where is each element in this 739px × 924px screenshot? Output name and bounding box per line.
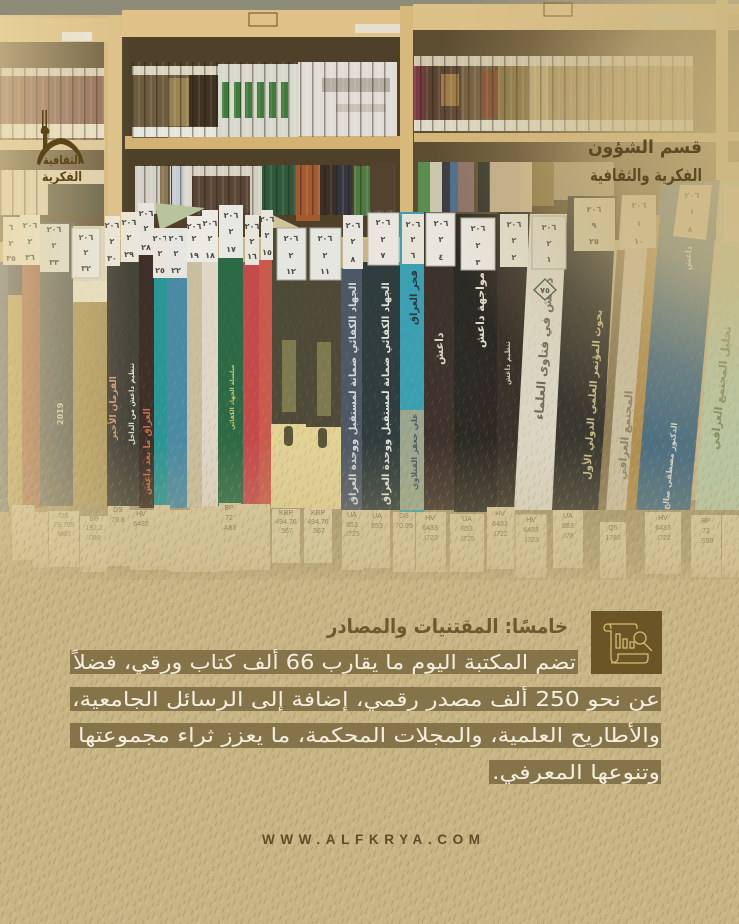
body text with highlighted lines: والأطاريح العلمية، والمجلات المحكمة، ما يعزز ثراء مجموعتها bbox=[78, 723, 660, 747]
spine number labels: ٢٠٦ bbox=[47, 225, 61, 234]
spine number labels: ٣٣ bbox=[49, 258, 59, 267]
call number stickers: KBP bbox=[311, 510, 325, 517]
spine number labels: ٢ bbox=[381, 235, 386, 244]
spine number labels: ٤ bbox=[439, 253, 444, 262]
call number stickers: 6433 bbox=[422, 525, 438, 532]
body text with highlighted lines: عن نحو 250 ألف مصدر رقمي، إضافة إلى الرسائل الجامعية، bbox=[72, 686, 660, 712]
book spine titles: المجتمع العراقي bbox=[615, 390, 636, 480]
call number stickers: M83 bbox=[57, 531, 71, 538]
books: lower shelf, right cell bbox=[370, 162, 739, 212]
spine number labels: ٢ bbox=[144, 224, 149, 233]
spine number labels: ١١ bbox=[320, 267, 330, 276]
spine number labels: ٢٥ bbox=[155, 266, 165, 275]
spine number labels: ١٢ bbox=[286, 267, 296, 276]
department heading bbox=[588, 137, 702, 186]
call number stickers: .S58 bbox=[699, 538, 713, 545]
spine number labels: ٢ bbox=[174, 249, 179, 258]
bookshelf unit bbox=[0, 0, 739, 242]
shadow gap beneath the books bbox=[0, 500, 739, 580]
book spine titles: تنظيم داعش bbox=[504, 341, 512, 385]
spine number labels: ٢٠٦ bbox=[587, 205, 601, 214]
spine number labels: ٢٠٦ bbox=[224, 211, 238, 220]
spine number labels: ٢ bbox=[351, 237, 356, 246]
call number stickers: 6433 bbox=[655, 525, 671, 532]
call number stickers: 494.76 bbox=[307, 519, 329, 526]
call number stickers: .I722 bbox=[422, 535, 438, 542]
book spine titles: سلسلة الجهاد الكفائي bbox=[229, 365, 236, 430]
call number stickers: UA bbox=[347, 512, 357, 519]
call number stickers: .I723 bbox=[523, 537, 539, 544]
call number stickers: HV bbox=[495, 511, 505, 518]
spine number labels: ٣٦ bbox=[25, 253, 35, 262]
spine number labels: ٢٩ bbox=[124, 250, 134, 259]
call number stickers: BP bbox=[89, 516, 99, 523]
badge on book spine bbox=[534, 279, 556, 300]
book spine titles: فخر العراق bbox=[409, 270, 420, 325]
spine number labels: ٢٠٦ bbox=[105, 221, 119, 230]
call number stickers: 853 bbox=[461, 526, 473, 533]
paper texture bbox=[0, 280, 739, 924]
call number stickers: 6433 bbox=[492, 521, 508, 528]
spine number labels: ٦ bbox=[9, 223, 14, 232]
call number stickers: 192.2 bbox=[85, 525, 103, 532]
book spine titles: تنظيم داعش من الداخل bbox=[128, 363, 136, 445]
book spine titles: الدكتور مصطفى صالح bbox=[661, 422, 679, 510]
logo bbox=[37, 110, 84, 185]
spine number labels: ٢٠٦ bbox=[139, 209, 153, 218]
department heading: قسم الشؤون bbox=[588, 137, 702, 158]
spine number labels: ١٧ bbox=[226, 245, 236, 254]
call number stickers: HV bbox=[658, 515, 668, 522]
spine number labels: ٢٠٦ bbox=[542, 223, 556, 232]
spine number labels: ٢ bbox=[192, 234, 197, 243]
department heading: الفكرية والثقافية bbox=[590, 166, 702, 186]
spine number labels: ١ bbox=[547, 255, 551, 264]
spine number labels: ٢٠٦ bbox=[79, 233, 93, 242]
call number stickers: .I725 bbox=[459, 536, 475, 543]
spine number labels: ١٦ bbox=[247, 252, 257, 261]
spine number labels: ٢ bbox=[250, 237, 255, 246]
book spine titles: بحوث المؤتمر العلمي الدولي الأول bbox=[580, 309, 605, 480]
spine number labels: ٣٢ bbox=[81, 264, 91, 273]
spine number labels: ٢ bbox=[323, 251, 328, 260]
spine number labels: ٦ bbox=[411, 251, 416, 260]
spine number labels: ٢٥ bbox=[589, 237, 599, 246]
spine number labels: ٢٠٦ bbox=[434, 219, 448, 228]
book spine titles: داعش في فتاوى العلماء bbox=[532, 277, 557, 420]
spine number labels bbox=[3, 185, 739, 280]
book spine titles: علي جعفر الفتلاوي bbox=[410, 413, 419, 490]
spine number labels: ١٥ bbox=[262, 248, 272, 257]
call number stickers: 79.789 bbox=[53, 522, 75, 529]
call number stickers: 853 bbox=[346, 522, 358, 529]
logo: الثقافية bbox=[43, 153, 81, 167]
call number stickers: 79.8 bbox=[111, 517, 125, 524]
call number stickers: DS bbox=[59, 513, 69, 520]
spine number labels: ٧ bbox=[381, 251, 386, 260]
spine number labels: ٢ bbox=[512, 236, 517, 245]
call number stickers: HV bbox=[136, 511, 146, 518]
spine number labels: ٣٠ bbox=[107, 254, 117, 263]
spine number labels: ٢٠٦ bbox=[23, 221, 37, 230]
books: upper shelf, middle cell bbox=[132, 62, 397, 138]
call number stickers: BP bbox=[224, 505, 234, 512]
spine number labels: ٢ bbox=[208, 234, 213, 243]
book spine titles: الفرمان الأخير bbox=[107, 376, 119, 441]
spine number labels: ٢ bbox=[265, 231, 270, 240]
call number stickers: 6433 bbox=[133, 521, 149, 528]
spine number labels: ٢٠٦ bbox=[471, 224, 485, 233]
call number stickers: 853 bbox=[371, 523, 383, 530]
call number stickers: 6433 bbox=[523, 527, 539, 534]
call number stickers: UA bbox=[563, 513, 573, 520]
spine number labels: ٢ bbox=[127, 233, 132, 242]
spine number labels: ٢٠٦ bbox=[203, 219, 217, 228]
section title: خامسًا: المقتنيات والمصادر bbox=[326, 614, 568, 638]
spine number labels: ٨ bbox=[351, 255, 356, 264]
spine number labels: ٢٠٦ bbox=[153, 234, 167, 243]
spine number labels: ٣٥ bbox=[6, 254, 16, 263]
book spine titles: الجهاد الكفائي ضمانة لمستقبل ووحدة العراق bbox=[348, 282, 359, 505]
book spine titles: العراق ما بعد داعش bbox=[143, 408, 153, 495]
badge on book spine: ٧٥ bbox=[540, 286, 550, 295]
logo: الفكرية bbox=[42, 170, 82, 185]
call number stickers: HV bbox=[425, 515, 435, 522]
spine number labels: ٢٠٦ bbox=[685, 191, 699, 200]
call number stickers: Q5 bbox=[608, 525, 618, 532]
call number stickers: .A83 bbox=[222, 525, 236, 532]
call number stickers: .567 bbox=[311, 528, 325, 535]
spine number labels: ٢ bbox=[84, 248, 89, 257]
spine number labels: ١٩ bbox=[189, 251, 199, 260]
body text with highlighted lines bbox=[70, 649, 661, 785]
call number stickers: HV bbox=[526, 517, 536, 524]
spine number labels: ١ bbox=[637, 219, 641, 228]
spine number labels: ٢ bbox=[52, 241, 57, 250]
call number stickers: .567 bbox=[279, 528, 293, 535]
spine number labels: ٢٠٦ bbox=[318, 234, 332, 243]
spine number labels: ٢ bbox=[411, 235, 416, 244]
spine number labels: ٢٠٦ bbox=[122, 218, 136, 227]
spine number labels: ٢ bbox=[158, 249, 163, 258]
section icon: scroll with chart and magnifier bbox=[591, 611, 662, 674]
spine number labels: ٢٠٦ bbox=[169, 234, 183, 243]
call number stickers: .I78 bbox=[562, 533, 574, 540]
website footer: WWW.ALFKRYA.COM bbox=[262, 832, 480, 847]
book spine titles: داعش bbox=[433, 332, 446, 365]
book spine titles: الجهاد الكفائي ضمانة لمستقبل ووحدة العراق bbox=[381, 282, 392, 505]
spine number labels: ٨ bbox=[688, 225, 693, 234]
call number stickers: KBP bbox=[279, 510, 293, 517]
body text with highlighted lines: وتنوعها المعرفي. bbox=[492, 760, 660, 785]
spine number labels: ٢٠٦ bbox=[632, 201, 646, 210]
spine number labels: ٢٠٦ bbox=[187, 222, 201, 231]
spine number labels: ٢ bbox=[512, 253, 517, 262]
call number stickers bbox=[12, 503, 739, 578]
books: upper shelf, left cell bbox=[0, 68, 104, 216]
book spine titles bbox=[56, 246, 734, 510]
books: lower shelf, middle cell bbox=[135, 165, 395, 221]
spine number labels: ٩ bbox=[592, 221, 597, 230]
books: upper shelf, right cell bbox=[414, 56, 693, 131]
spine number labels: ٢ bbox=[547, 239, 552, 248]
call number stickers: .I725 bbox=[344, 531, 360, 538]
spine number labels: ٢ bbox=[439, 235, 444, 244]
spine number labels: ٢٠٦ bbox=[346, 221, 360, 230]
call number stickers: 72 bbox=[225, 515, 233, 522]
spine number labels: ٢٠٦ bbox=[245, 222, 259, 231]
book spine titles: مواجهة داعش bbox=[474, 272, 487, 348]
call number stickers: 72 bbox=[702, 528, 710, 535]
call number stickers: 1788 bbox=[605, 535, 621, 542]
spine number labels: ٢٠٦ bbox=[376, 218, 390, 227]
call number stickers: .089 bbox=[87, 535, 101, 542]
call number stickers: 70.95 bbox=[395, 523, 413, 530]
spine number labels: ٢ bbox=[110, 237, 115, 246]
spine number labels: ٣ bbox=[476, 258, 481, 267]
spine number labels: ١٠ bbox=[634, 237, 644, 246]
call number stickers: .I722 bbox=[655, 535, 671, 542]
call number stickers: UA bbox=[372, 513, 382, 520]
call number stickers: BP bbox=[701, 518, 711, 525]
front row of books bbox=[0, 180, 739, 512]
spine number labels: ١ bbox=[690, 207, 694, 216]
book spine titles: داعش bbox=[683, 246, 695, 270]
spine number labels: ٢٨ bbox=[141, 243, 151, 252]
spine number labels: ٢٠٦ bbox=[507, 220, 521, 229]
spine number labels: ٢٠٦ bbox=[260, 215, 274, 224]
spine number labels: ٢ bbox=[28, 237, 33, 246]
call number stickers: 494.76 bbox=[275, 519, 297, 526]
spine number labels: ٢٢ bbox=[171, 266, 181, 275]
spine number labels: ٢ bbox=[229, 227, 234, 236]
book spine titles: 2019 bbox=[56, 402, 65, 425]
spine number labels: ٢٠٦ bbox=[284, 234, 298, 243]
call number stickers: DS bbox=[399, 513, 409, 520]
book spine titles: تحليل المجتمع العراقي bbox=[708, 325, 734, 450]
spine number labels: ٢ bbox=[476, 241, 481, 250]
spine number labels: ٢ bbox=[9, 239, 14, 248]
body text with highlighted lines: تضم المكتبة اليوم ما يقارب 66 ألف كتاب ورقي، فضلاً bbox=[71, 649, 576, 675]
spine number labels: ٢ bbox=[289, 251, 294, 260]
call number stickers: 853 bbox=[562, 523, 574, 530]
spine number labels: ١٨ bbox=[205, 251, 215, 260]
call number stickers: UA bbox=[462, 516, 472, 523]
call number stickers: .I722 bbox=[492, 531, 508, 538]
call number stickers: DS bbox=[113, 507, 123, 514]
spine number labels: ٢٠٦ bbox=[406, 220, 420, 229]
